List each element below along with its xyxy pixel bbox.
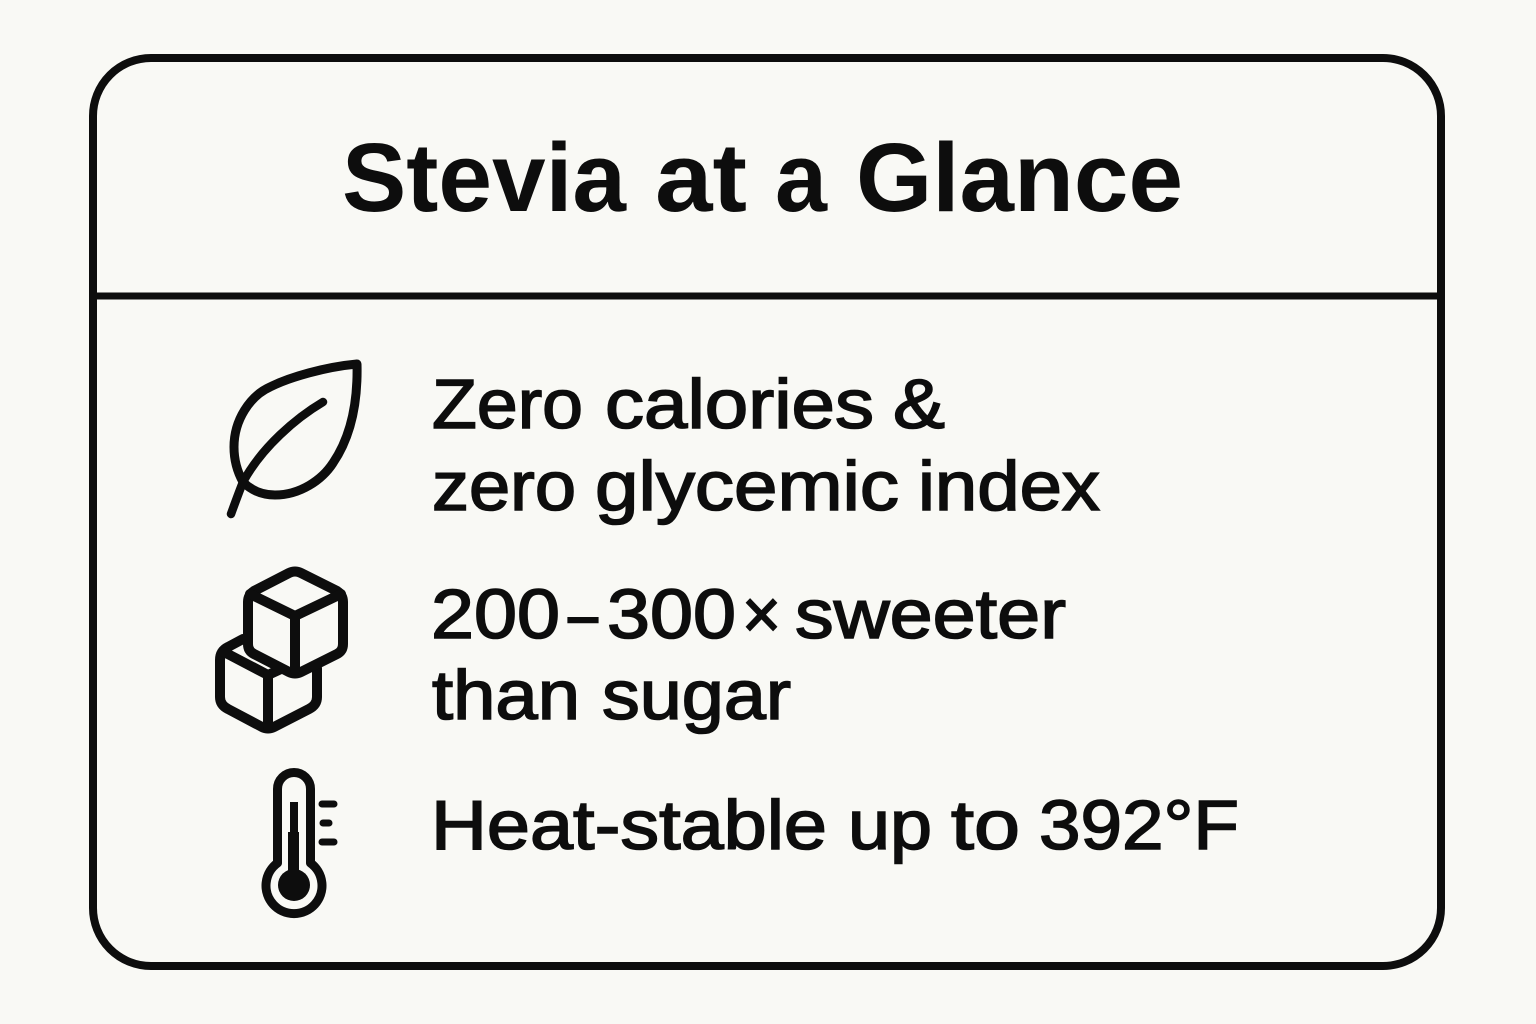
text: zero calories — [432, 365, 1100, 525]
text: sweetness: sweeter — [795, 575, 1066, 653]
icon: leaf — [231, 364, 357, 514]
text: heat stability — [431, 786, 1239, 864]
text: sweetness: sugar — [602, 656, 791, 734]
text: sweetness: 300 — [607, 575, 736, 653]
text: heat stability: Heat-stable — [431, 786, 827, 864]
text: zero calories: index — [918, 447, 1100, 525]
text: heat stability: up — [848, 786, 932, 864]
icon: sugar cubes — [220, 572, 343, 728]
text: sweetness: 200 — [431, 575, 560, 653]
title: at — [655, 123, 747, 232]
panel: card frame — [93, 58, 1441, 966]
text: sweetness: – — [568, 575, 598, 653]
text: zero calories: zero — [432, 447, 576, 525]
text: sweetness: than — [432, 656, 580, 734]
text: sweetness — [431, 575, 1066, 734]
text: heat stability: to — [951, 786, 1020, 864]
title: Stevia — [342, 123, 627, 232]
text: heat stability: 392°F — [1039, 786, 1239, 864]
text: zero calories: glycemic — [595, 447, 899, 525]
text: sweetness: × — [742, 575, 781, 653]
title: Glance — [856, 123, 1183, 232]
icon: thermometer — [266, 773, 334, 914]
title — [342, 123, 1183, 232]
text: zero calories: calories — [605, 365, 874, 443]
text: zero calories: & — [893, 365, 945, 443]
text: zero calories: Zero — [432, 365, 583, 443]
title: a — [775, 123, 828, 232]
